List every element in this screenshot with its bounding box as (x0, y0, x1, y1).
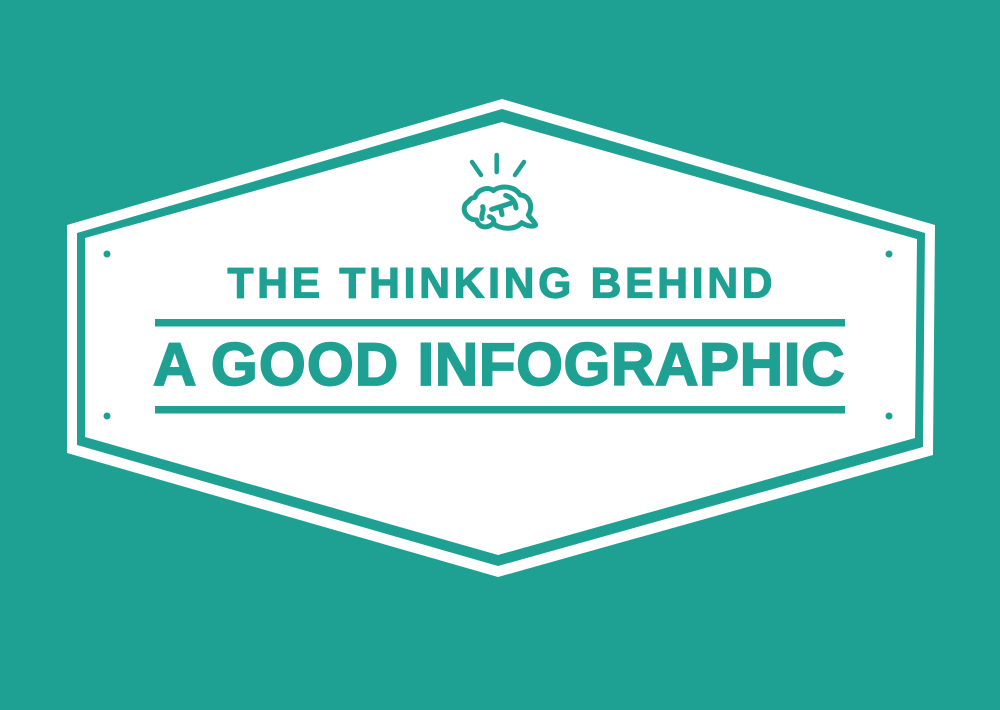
icon: brain with idea rays (464, 155, 536, 228)
rule below heading line 2 (155, 406, 845, 414)
badge: hexagon sign (67, 99, 935, 577)
heading line 2: A (153, 331, 211, 398)
rule above heading line 2 (155, 319, 845, 326)
heading line 2: GOOD (211, 331, 418, 398)
badge teal ring (77, 109, 925, 566)
brain outline and folds (464, 187, 536, 228)
heading line 1: THE THINKING BEHIND (228, 260, 772, 308)
heading line 2: INFOGRAPHIC (418, 331, 845, 398)
badge white panel (85, 122, 917, 555)
idea rays (472, 155, 524, 175)
badge outer white border (67, 99, 935, 577)
corner rivets (104, 250, 892, 420)
